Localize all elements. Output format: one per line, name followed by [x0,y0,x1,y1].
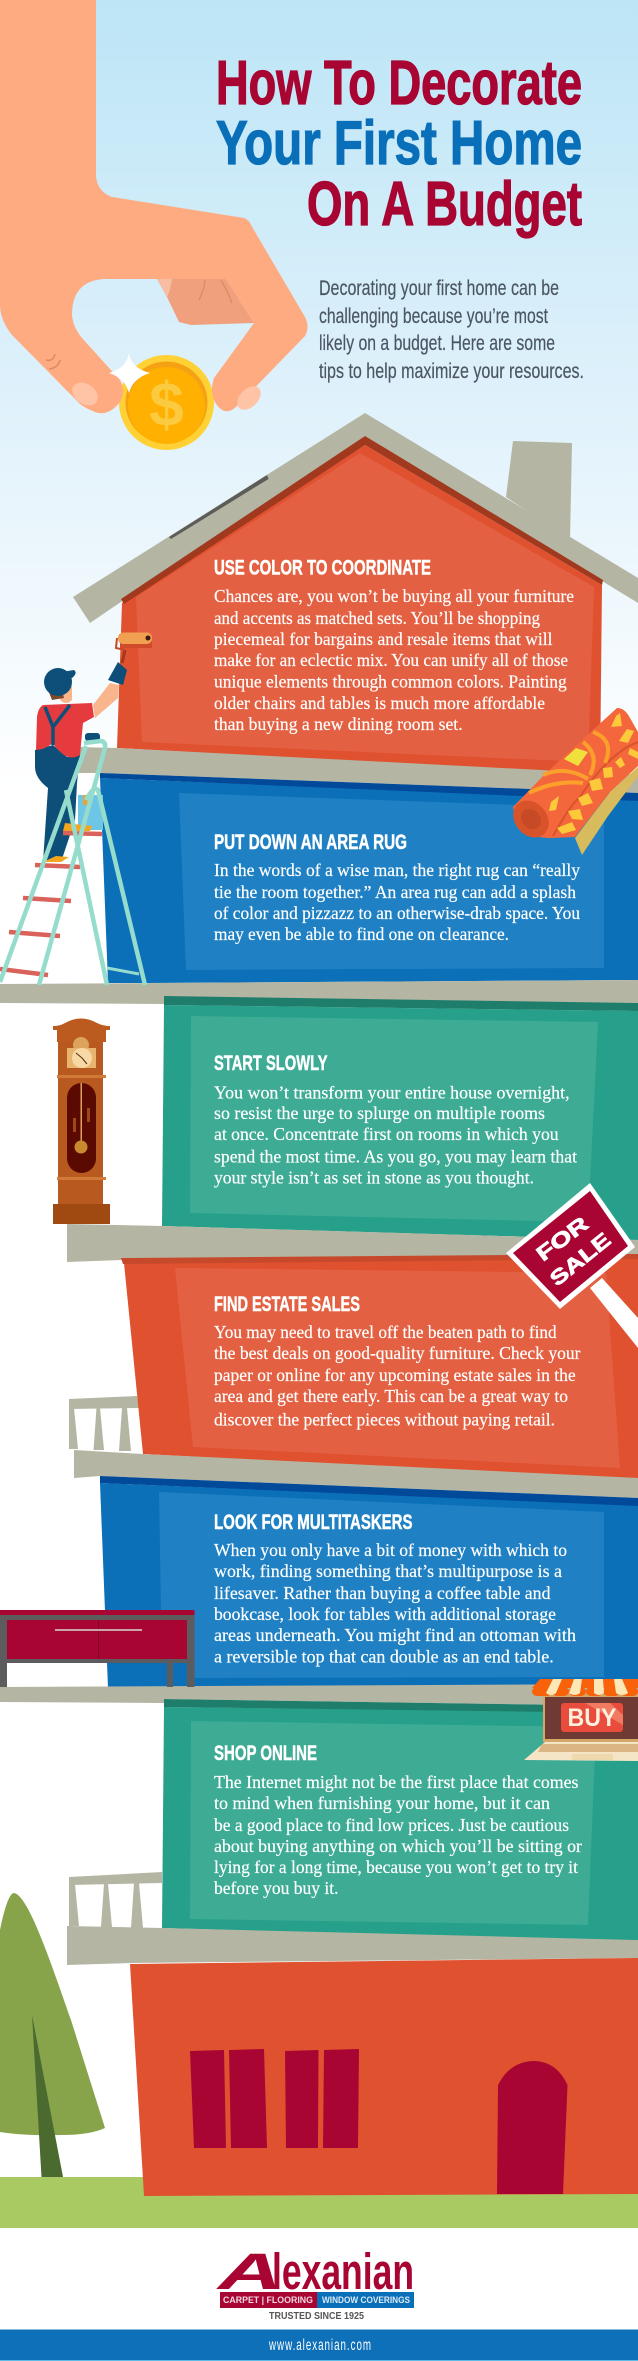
house roof [73,413,638,623]
body text: so resist the urge to splurge on multiple rooms [214,1103,545,1123]
logo: TRUSTED SINCE 1925 [269,2311,364,2322]
body text: piecemeal for bargains and resale items that will [214,629,553,649]
body text: older chairs and tables is much more affordable [214,693,545,713]
body text: lying for a long time, because you won’t get to try it [214,1857,578,1877]
body text: to mind when furnishing your home, but it can [214,1793,550,1813]
icon: hand holding coin [0,0,308,414]
body text: about buying anything on which you’ll be sitting or [214,1836,582,1856]
body text: may even be able to find one on clearance. [214,924,509,944]
body text [214,1540,576,1667]
icon: ladder back [78,795,103,830]
body text: The Internet might not be the first place that comes [214,1772,579,1792]
grass [0,2177,638,2228]
icon: grandfather clock [53,1018,110,1224]
body text: When you only have a bit of money with which to [214,1540,567,1560]
panel: find estate sales [121,1254,638,1480]
body text: before you buy it. [214,1878,338,1898]
floor band 4 [74,1450,638,1498]
icon: step ladder [0,741,145,985]
icon: coin [119,355,214,450]
icon: for sale sign: SALE [546,1228,615,1291]
body text: than buying a new dining room set. [214,714,463,734]
floor band 3 [67,1224,638,1262]
body text: Chances are, you won’t be buying all your furniture [214,586,574,606]
body text: unique elements through common colors. Painting [214,671,567,691]
intro text: Decorating your first home can be [319,277,559,300]
panel: put down an area rug [100,773,638,983]
icon: laptop shop [524,1679,638,1761]
body text: and accents as matched sets. You’ll be shopping [214,608,540,628]
body text [214,1082,577,1187]
railing 1 [69,1396,139,1451]
heading: START SLOWLY [214,1051,328,1075]
floor band 6 [67,1926,638,1965]
panel: use color to coordinate [117,436,603,775]
panel: shop online [162,1699,638,1942]
body text: spend the most time. As you go, you may learn that [214,1146,577,1166]
body text: a reversible top that can double as an end table. [214,1647,554,1667]
body text: area and get there early. This can be a great way to [214,1386,568,1406]
intro text: challenging because you’re most [319,305,548,328]
heading: PUT DOWN AN AREA RUG [214,830,407,854]
body text [214,1322,581,1429]
body text: discover the perfect pieces without paying retail. [214,1409,555,1429]
heading: LOOK FOR MULTITASKERS [214,1510,412,1534]
windows [190,2049,359,2148]
icon: for sale sign [506,1183,638,1348]
intro text: likely on a budget. Here are some [319,332,555,355]
title [216,49,582,239]
icon: rolled rug [506,708,638,855]
body text [214,586,574,734]
chimney [506,441,572,540]
body text: lifesaver. Rather than buying a coffee table and [214,1583,551,1603]
tree [0,1893,105,2177]
body text: your style isn’t as set in stone as you thought. [214,1167,534,1187]
icon: console table [0,1610,194,1687]
body text: In the words of a wise man, the right rug can “really [214,860,580,880]
body text: You may need to travel off the beaten path to find [214,1322,557,1342]
body text: the best deals on good-quality furniture. Check your [214,1343,581,1363]
intro text [319,277,584,383]
sky background [0,0,638,790]
floor band 1 [76,747,638,793]
icon: sparkle [109,353,150,393]
icon: coin: $ [149,371,184,440]
body text: be a good place to find low prices. Just be cautious [214,1815,569,1835]
roof dark strip [169,475,268,539]
heading: USE COLOR TO COORDINATE [214,556,431,580]
logo: lexanian [272,2243,414,2300]
door [497,2061,568,2194]
icon: laptop shop: BUY [568,1704,617,1732]
body text [214,860,580,944]
footer bar [0,2330,638,2361]
heading: FIND ESTATE SALES [214,1292,360,1316]
ground floor of house [130,1958,638,2196]
body text: tie the room together.” An area rug can add a splash [214,882,576,902]
body text: at once. Concentrate first on rooms in which you [214,1124,559,1144]
floor band 5 [0,1684,638,1706]
footer bar: www.alexanian.com [268,2337,372,2354]
body text [214,1772,582,1898]
railing 2 [69,1872,162,1928]
body text: work, finding something that’s multipurpose is a [214,1561,562,1581]
floor band 2 [0,980,638,1004]
heading: SHOP ONLINE [214,1741,317,1765]
body text: paper or online for any upcoming estate sales in the [214,1365,576,1385]
logo: A [215,2243,282,2300]
body text: make for an eclectic mix. You can unify all of those [214,650,568,670]
panel: look for multitaskers [100,1476,638,1688]
body text: bookcase, look for tables with additional storage [214,1604,556,1624]
icon: for sale sign: FOR [532,1212,593,1266]
body text: You won’t transform your entire house overnight, [214,1082,570,1102]
body text: of color and pizzazz to an otherwise-drab space. You [214,903,580,923]
panel: start slowly [162,996,638,1240]
logo [215,2243,414,2322]
icon: painter [35,632,152,862]
logo: WINDOW COVERINGS [322,2295,410,2305]
logo: CARPET | FLOORING [223,2295,313,2305]
body text: areas underneath. You might find an ottoman with [214,1625,576,1645]
